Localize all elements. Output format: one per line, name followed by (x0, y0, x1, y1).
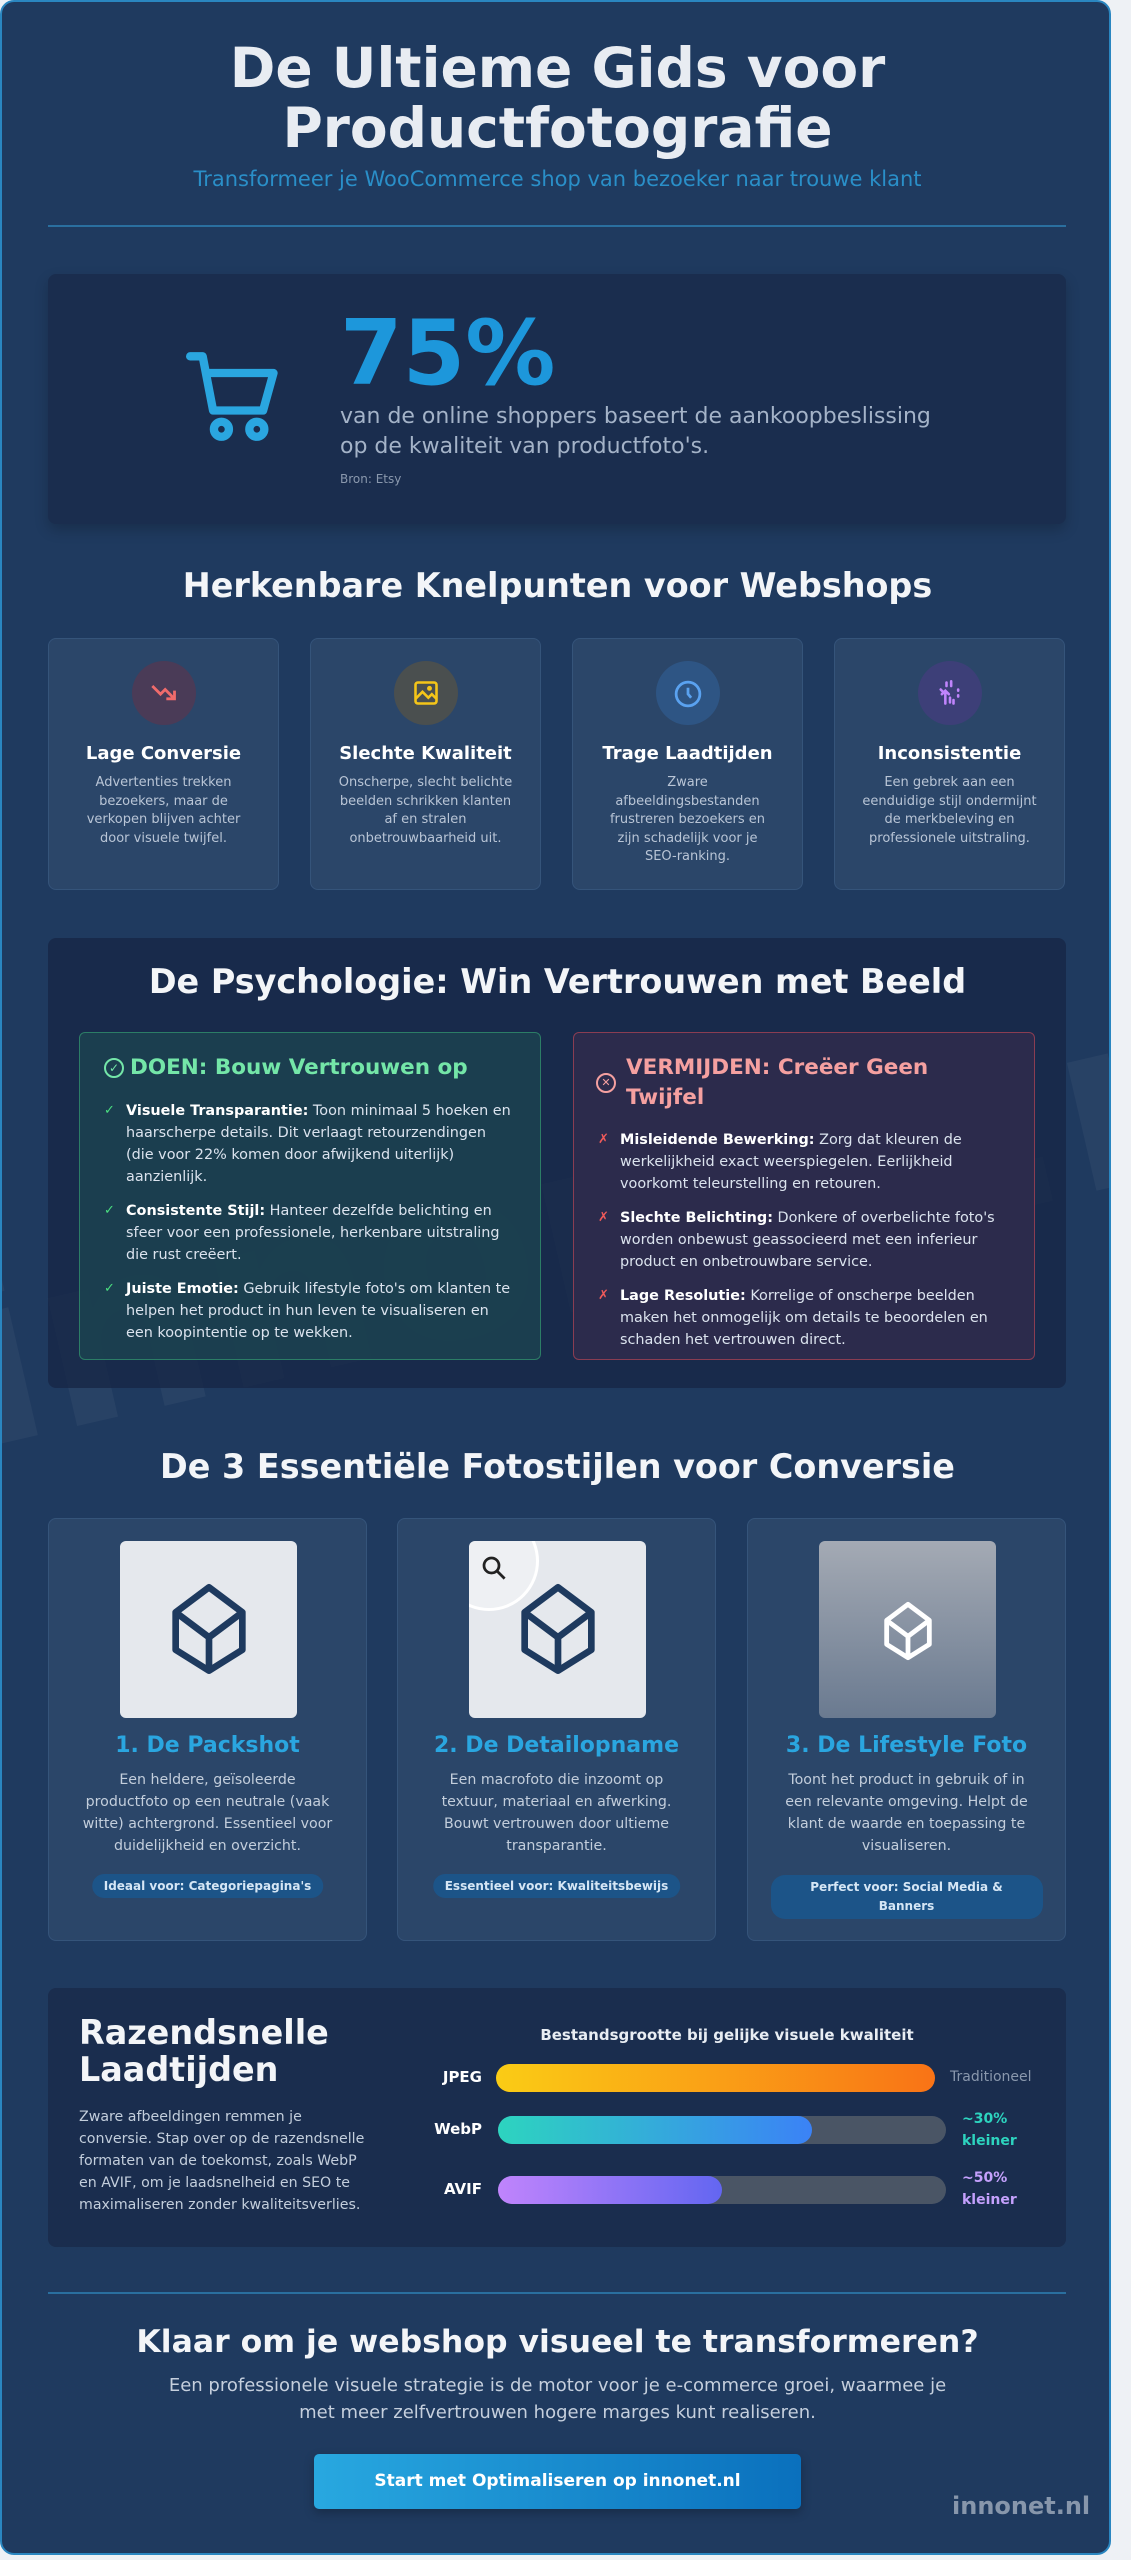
heading (79, 2013, 329, 2089)
icon: clock (656, 661, 720, 725)
box: doen: DOEN: Bouw Vertrouwen op (130, 1055, 468, 1080)
heading: fotostijlen: De 3 Essentiële Fotostijlen voor Conversie (160, 1447, 955, 1486)
card: lifestyle: 3. De Lifestyle Foto (786, 1733, 1027, 1758)
button: Start met Optimaliseren op innonet.nl (374, 2471, 741, 2491)
card: slechte kwaliteit: Slechte Kwaliteit (339, 743, 512, 764)
box: vermijden (573, 1032, 1035, 1360)
card: lage conversie (48, 638, 279, 890)
cta heading: Klaar om je webshop visueel te transformeren? (136, 2324, 979, 2360)
stat panel (48, 274, 1066, 524)
card: packshot (48, 1518, 367, 1941)
cta text: Een professionele visuele strategie is de motor voor je e-commerce groei, waarmee je met meer zelfvertrouwen hogere marges kunt realiseren. (169, 2375, 946, 2423)
icon: box (120, 1541, 297, 1718)
stat text: van de online shoppers baseert de aankoopbeslissing op de kwaliteit van productfoto's. (340, 404, 931, 459)
box: doen: ✓ (104, 1281, 115, 1296)
icon: image (394, 661, 458, 725)
card: slechte kwaliteit (310, 638, 541, 890)
bar chart: kleiner (962, 2133, 1017, 2149)
card: lifestyle: Perfect voor: Social Media & Banners (810, 1880, 1003, 1913)
title: Productfotografie (282, 96, 833, 160)
stat number: 75% (340, 301, 555, 406)
card: trage laadtijden (572, 638, 803, 890)
title: De Ultieme Gids voor (230, 36, 885, 100)
card: trage laadtijden: Trage Laadtijden (602, 743, 773, 764)
card: lifestyle (747, 1518, 1066, 1941)
card: lage conversie: Advertenties trekken bezoekers, maar de verkopen blijven achter door visuele twijfel. (87, 775, 240, 846)
card: packshot: Een heldere, geïsoleerde productfoto op een neutrale (vaak witte) achtergrond. Essentieel voor duidelijkheid en overzicht. (83, 1772, 332, 1854)
bar chart: Traditioneel (950, 2069, 1032, 2085)
bar chart: kleiner (962, 2192, 1017, 2208)
bar chart: Bestandsgrootte bij gelijke visuele kwaliteit (540, 2026, 914, 2044)
card: packshot: Ideaal voor: Categoriepagina's (104, 1879, 311, 1893)
card: inconsistentie (834, 638, 1065, 890)
bar chart: ~30% (962, 2111, 1007, 2127)
box: vermijden: Slechte Belichting: Donkere of overbelichte foto's worden onbewust geassocieerd met een inferieur product en onbetrouwbare service. (620, 1210, 995, 1270)
box: doen (79, 1032, 541, 1360)
box: vermijden: VERMIJDEN: Creëer Geen Twijfel (626, 1055, 928, 1110)
box: doen: Consistente Stijl: Hanteer dezelfde belichting en sfeer voor een professionele, herkenbare uitstraling die rust creëert. (126, 1203, 500, 1263)
title (230, 36, 886, 160)
card: detailopname (397, 1518, 716, 1941)
bar chart (434, 2026, 1032, 2208)
box: doen: ✓ (104, 1103, 115, 1118)
box: doen: Visuele Transparantie: Toon minimaal 5 hoeken en haarscherpe details. Dit verlaagt retourzendingen (die voor 22% komen door afwijkend uiterlijk) aanzienlijk. (126, 1103, 511, 1185)
icon: scatter (918, 661, 982, 725)
card: inconsistentie: Inconsistentie (878, 743, 1021, 764)
icon: box on gradient (819, 1541, 996, 1718)
heading: psychologie: De Psychologie: Win Vertrouwen met Beeld (149, 962, 966, 1001)
panel: psychologie (48, 938, 1066, 1388)
card: lage conversie: Lage Conversie (86, 743, 241, 764)
card: trage laadtijden: Zware afbeeldingsbestanden frustreren bezoekers en zijn schadelijk voor je SEO-ranking. (610, 775, 765, 864)
card: detailopname: Essentieel voor: Kwaliteitsbewijs (445, 1879, 668, 1893)
card: packshot: 1. De Packshot (115, 1733, 300, 1758)
source: Bron: Etsy (340, 472, 401, 486)
card: slechte kwaliteit: Onscherpe, slecht belichte beelden schrikken klanten af en stralen onbetrouwbaarheid uit. (339, 775, 512, 846)
button (314, 2454, 801, 2509)
card: inconsistentie: Een gebrek aan een eenduidige stijl ondermijnt de merkbeleving en professionele uitstraling. (862, 775, 1037, 846)
bar chart: JPEG (443, 2068, 482, 2086)
bar chart: WebP (434, 2120, 482, 2138)
heading: Laadtijden (79, 2050, 278, 2089)
heading: Razendsnelle (79, 2013, 329, 2052)
subtitle: Transformeer je WooCommerce shop van bezoeker naar trouwe klant (193, 167, 922, 191)
card: detailopname: 2. De Detailopname (434, 1733, 679, 1758)
box: doen: ✓ (104, 1203, 115, 1218)
panel: laadtijden (48, 1988, 1066, 2247)
card: lifestyle: Toont het product in gebruik of in een relevante omgeving. Helpt de klant de waarde en toepassing te visualiseren. (785, 1772, 1028, 1854)
box: doen: ✓ (109, 1061, 119, 1075)
logo text: innonet.nl (952, 2492, 1090, 2520)
heading: knelpunten: Herkenbare Knelpunten voor Webshops (183, 566, 932, 605)
icon: trend down (132, 661, 196, 725)
text: Zware afbeeldingen remmen je conversie. Stap over op de razendsnelle formaten van de toekomst, zoals WebP en AVIF, om je laadsnelheid en SEO te maximaliseren zonder kwaliteitsverlies. (79, 2109, 364, 2213)
icon: box with magnifier (469, 1541, 646, 1718)
box: vermijden: ✗ (598, 1210, 609, 1225)
icon: cart (186, 352, 278, 441)
box: vermijden: Lage Resolutie: Korrelige of onscherpe beelden maken het onmogelijk om details te beoordelen en schaden het vertrouwen direct. (620, 1288, 988, 1348)
box: doen: Juiste Emotie: Gebruik lifestyle foto's om klanten te helpen het product in hun leven te visualiseren en een koopintentie op te wekken. (126, 1281, 510, 1341)
bar chart: AVIF (444, 2180, 482, 2198)
bar chart: ~50% (962, 2170, 1007, 2186)
card: detailopname: Een macrofoto die inzoomt op textuur, materiaal en afwerking. Bouwt vertrouwen door ultieme transparantie. (442, 1772, 671, 1854)
box: vermijden: Misleidende Bewerking: Zorg dat kleuren de werkelijkheid exact weerspiegelen. Eerlijkheid voorkomt teleurstelling en retouren. (620, 1132, 962, 1192)
box: vermijden: ✗ (598, 1132, 609, 1147)
box: vermijden: ✕ (601, 1076, 611, 1089)
box: vermijden: ✗ (598, 1288, 609, 1303)
